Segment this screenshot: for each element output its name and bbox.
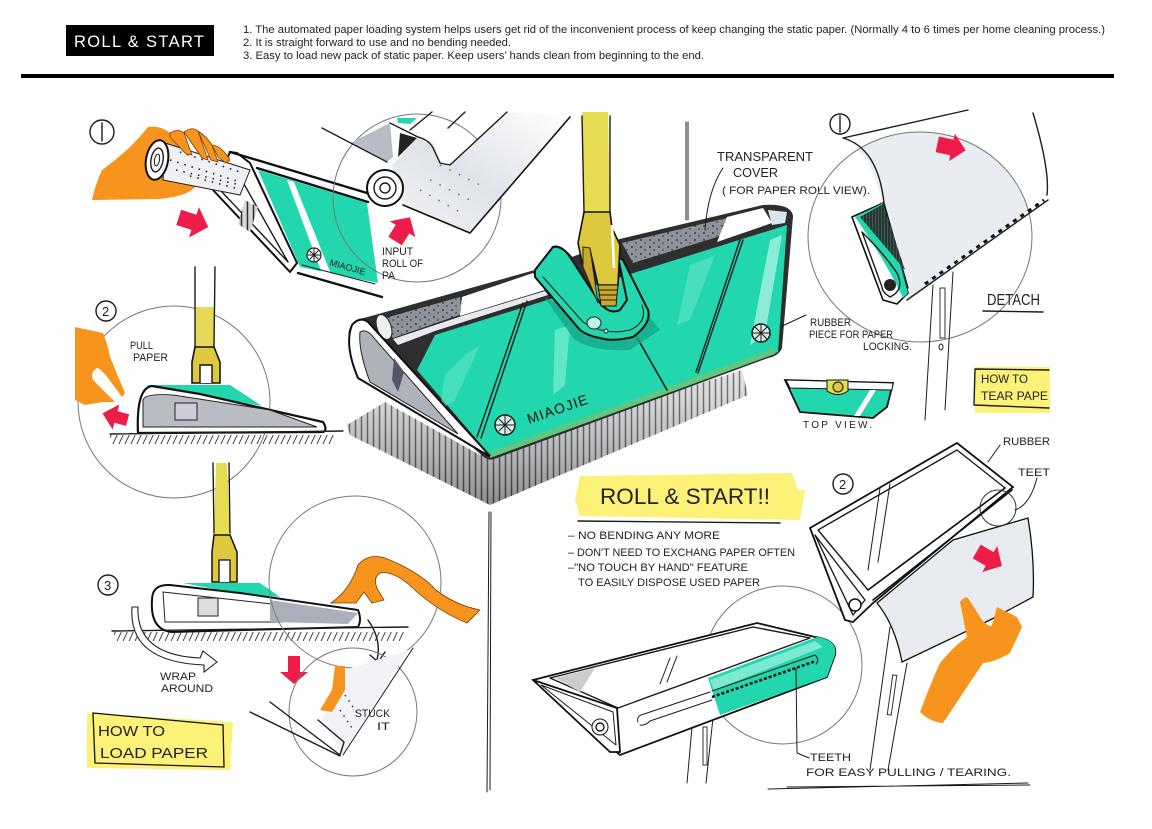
arrow: tear direction xyxy=(969,539,1009,579)
label: transparent cover: COVER xyxy=(733,165,778,180)
handle xyxy=(192,267,220,383)
bullet notes: TO EASILY DISPOSE USED PAPER xyxy=(578,577,760,589)
label: how to tear paper: TEAR PAPE xyxy=(981,391,1048,403)
label: rubber xyxy=(988,436,1050,462)
hand pulling paper xyxy=(75,327,125,405)
step number 3 xyxy=(98,575,118,595)
label: rubber piece xyxy=(780,315,912,353)
label: how to tear paper: HOW TO xyxy=(981,374,1028,386)
label: rubber: RUBBER xyxy=(1003,436,1050,448)
teal body panel xyxy=(417,225,787,458)
arrow: insert direction xyxy=(174,202,213,242)
detail: roll inserted into cap xyxy=(322,112,570,233)
label: stuck it: STUCK xyxy=(355,708,391,720)
divider line xyxy=(487,512,491,792)
device xyxy=(810,443,1013,622)
wrap around arrow xyxy=(132,607,217,672)
label: stuck it xyxy=(355,708,391,733)
label: input roll: INPUT xyxy=(382,246,413,258)
floor hatch xyxy=(112,627,408,641)
detail circle xyxy=(78,306,270,498)
paper roll and transparent cover xyxy=(373,208,787,345)
curved down arrow xyxy=(368,620,385,662)
stuck paper detail xyxy=(250,648,413,756)
arrow: detach direction xyxy=(934,131,969,164)
label: rubber piece: PIECE FOR PAPER xyxy=(809,329,893,341)
label: transparent cover: TRANSPARENT xyxy=(717,149,813,164)
hand pressing xyxy=(331,557,480,623)
label: input roll: ROLL OF xyxy=(382,258,423,270)
label: rubber piece: LOCKING. xyxy=(863,341,912,353)
yellow headline: ROLL & START!! xyxy=(600,484,770,509)
label: how to load paper xyxy=(87,713,233,770)
label: wrap around: WRAP xyxy=(160,671,196,683)
yellow pole and threaded head xyxy=(578,112,620,306)
detail circle xyxy=(704,586,862,744)
label: detach: DETACH xyxy=(987,292,1040,309)
device body xyxy=(533,623,835,755)
label: wrap around xyxy=(160,671,213,695)
label: how to load paper: LOAD PAPER xyxy=(100,745,208,762)
sketch: tearing step 2 xyxy=(810,436,1050,770)
header: title badge: ROLL & START xyxy=(74,33,204,51)
label: transparent cover xyxy=(705,149,870,230)
step number 1 xyxy=(90,120,114,144)
device with teal panel: MIAOJIE xyxy=(328,257,367,277)
step number 2: 2 xyxy=(102,304,109,319)
wedge body xyxy=(152,583,360,632)
step number 3: 3 xyxy=(104,578,111,593)
detail circle xyxy=(333,114,501,282)
label: teeth xyxy=(1015,467,1050,510)
paper sheet xyxy=(843,110,1048,300)
header: feature description text: 2. It is straight forward to use and no bending needed. xyxy=(243,37,511,49)
background pole line xyxy=(686,122,688,220)
pole xyxy=(870,627,907,770)
header rule xyxy=(21,74,1114,78)
handle mount U xyxy=(535,247,660,350)
label: input roll: PA xyxy=(382,270,396,282)
sketch: how to load paper step 3 xyxy=(87,463,480,776)
floor hatch xyxy=(110,431,343,444)
hand holding paper roll xyxy=(92,127,250,200)
top view sketch: TOP VIEW. xyxy=(803,420,872,431)
device with teal panel xyxy=(213,152,382,297)
headline note block xyxy=(568,473,805,589)
handle xyxy=(212,463,237,582)
label: pull paper xyxy=(130,340,168,364)
arrow: roll input xyxy=(382,209,423,249)
header: feature description text: 3. Easy to load new pack of static paper. Keep users’ hands clean from beginning to the end. xyxy=(243,50,704,62)
label: how to load paper: HOW TO xyxy=(98,723,165,740)
yellow headline xyxy=(575,473,805,523)
bullet notes: –"NO TOUCH BY HAND" FEATURE xyxy=(568,562,748,574)
label: transparent cover: ( FOR PAPER ROLL VIEW). xyxy=(722,185,870,197)
header: feature description text xyxy=(243,24,1105,62)
teeth callout: TEETH xyxy=(810,752,851,764)
detail circle xyxy=(808,132,1032,342)
teeth callout xyxy=(768,668,1030,789)
main product sketch xyxy=(347,112,870,505)
label: how to tear paper xyxy=(974,367,1050,413)
label: rubber piece: RUBBER xyxy=(810,317,851,329)
detail circle top xyxy=(269,496,441,668)
arrow: pull direction xyxy=(99,401,131,433)
sketch: pull paper step 2 xyxy=(75,267,343,498)
sketch: roll loading step 1 xyxy=(90,112,570,297)
wedge body xyxy=(138,385,326,433)
bullet notes: – DON'T NEED TO EXCHANG PAPER OFTEN xyxy=(568,547,795,559)
torn paper xyxy=(877,518,1033,662)
step number 2: 2 xyxy=(839,477,846,492)
top view sketch xyxy=(785,380,893,431)
sketch: teeth close-up xyxy=(533,586,1030,789)
step number 2 xyxy=(96,301,116,321)
header: feature description text: 1. The automated paper loading system helps users get rid of the inconvenient process of keep changing the static paper. (Normally 4 to 6 times per home cleaning process.) xyxy=(243,24,1105,36)
label: stuck it: IT xyxy=(377,721,390,733)
brand logo screw left xyxy=(495,415,515,435)
paper inside detail circle xyxy=(858,132,1028,298)
left end cap xyxy=(349,320,490,456)
teeth callout: FOR EASY PULLING / TEARING. xyxy=(806,767,1011,779)
brand name: MIAOJIE xyxy=(525,391,591,427)
arrow: fold down xyxy=(280,656,308,684)
label: teeth: TEET xyxy=(1018,467,1050,479)
hand pulling paper xyxy=(920,598,1022,723)
teeth detail circle xyxy=(980,490,1016,526)
sketch: detach step 1 xyxy=(780,110,1050,431)
body dark outline xyxy=(349,206,792,459)
label: input roll xyxy=(382,246,423,282)
sheet outline xyxy=(843,110,1047,288)
step number 1 xyxy=(830,114,850,134)
pole xyxy=(925,272,953,420)
bullet notes xyxy=(568,530,795,589)
label: pull paper: PAPER xyxy=(133,352,168,364)
tear edge xyxy=(907,200,1048,300)
floor shadow hatch xyxy=(347,370,748,505)
step number 2 xyxy=(833,474,853,494)
pole xyxy=(687,718,713,783)
rubber piece screw right xyxy=(752,324,770,342)
bullet notes: – NO BENDING ANY MORE xyxy=(568,530,720,542)
label: wrap around: AROUND xyxy=(161,683,213,695)
header: title badge xyxy=(66,25,214,56)
end cap with teal edge xyxy=(852,203,908,304)
detail circle bottom xyxy=(289,648,417,776)
label: pull paper: PULL xyxy=(130,340,153,352)
